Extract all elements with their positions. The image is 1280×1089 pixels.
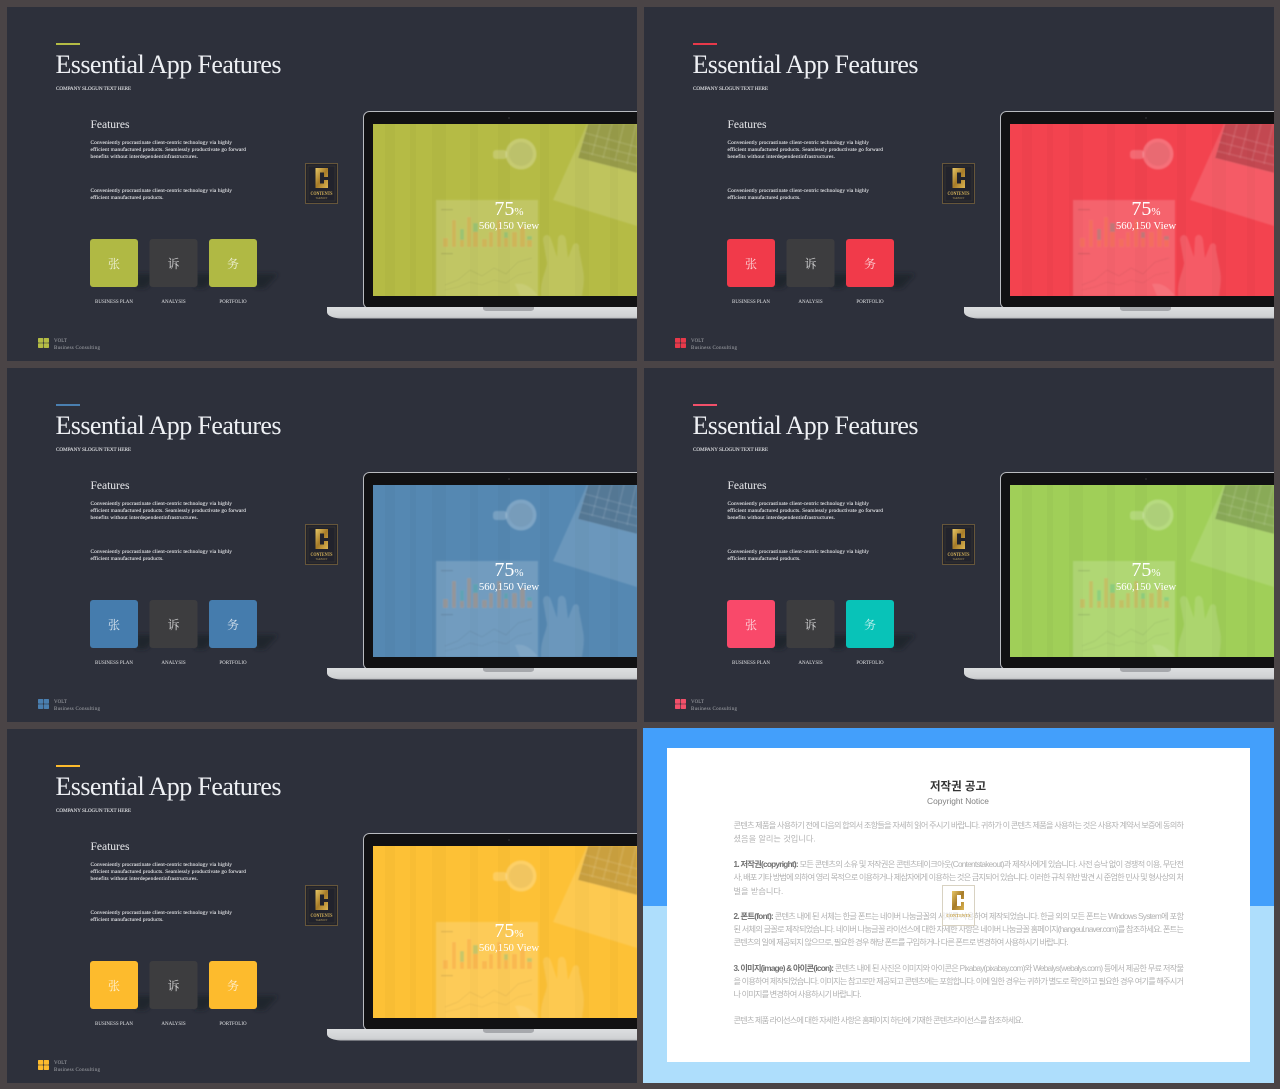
footer logo: Business Consulting [691, 707, 738, 712]
accent line [56, 404, 80, 406]
icon tiles: BUSINESS PLAN [95, 1022, 133, 1027]
icon tiles: PORTFOLIO [219, 300, 247, 305]
slogan: COMPANY SLOGUN TEXT HERE [693, 86, 768, 92]
text block: features [90, 118, 246, 201]
icon tiles: ANALYSIS [161, 300, 186, 305]
text block: features: Conveniently procrastinate client-centric technology via highly [728, 188, 869, 194]
gold badge [942, 164, 974, 204]
gold badge: CONTENTS [310, 192, 333, 197]
icon tiles: 务 [227, 979, 239, 993]
icon tiles: PORTFOLIO [219, 1022, 247, 1027]
slogan: COMPANY SLOGUN TEXT HERE [56, 86, 131, 92]
gold badge [942, 524, 974, 564]
gold badge [306, 524, 338, 564]
footer logo: VOLT [691, 700, 704, 705]
slogan: COMPANY SLOGUN TEXT HERE [56, 808, 131, 814]
text block: features: efficient manufactured products. Seamlessly productivate go forward [90, 868, 246, 875]
text block: features: efficient manufactured products. [90, 194, 164, 201]
icon tiles: 务 [227, 618, 239, 632]
text block: features: Conveniently procrastinate client-centric technology via highly [90, 188, 232, 194]
laptop mockup [327, 834, 654, 1040]
laptop mockup [327, 112, 654, 318]
text block: features: efficient manufactured products. Seamlessly productivate go forward [728, 146, 883, 153]
text block: features: benefits without interdependentinfrastructures. [90, 875, 198, 882]
copyright body text: 3. 이미지(image) & 아이콘(icon): 콘텐츠 내에 된 사진은 이미지와 아이콘은 Pixabay(pixabay.com)와 Webalys(webalys.com) 등에서 제공한 무료 저작물 [734, 963, 1184, 973]
panel: green slide [644, 368, 1280, 722]
copyright body text: 2. 폰트(font): 콘텐츠 내에 된 서체는 한글 폰트는 네이버 나눔글꼴의 서체를 사용하여 제작되었습니다. 한글 외의 모든 폰트는 Windows System에 포함 [734, 911, 1184, 921]
text block: features: efficient manufactured products. Seamlessly productivate go forward [90, 146, 246, 153]
footer logo [38, 699, 100, 712]
footer logo [38, 1060, 100, 1073]
icon tiles: 诉 [804, 257, 817, 271]
icon tiles: BUSINESS PLAN [95, 661, 133, 666]
text block: features: Conveniently procrastinate client-centric technology via highly [90, 910, 232, 916]
laptop mockup: 75% [494, 920, 524, 942]
icon tiles: 张 [108, 257, 120, 271]
text block: features: efficient manufactured products. [728, 555, 800, 562]
footer logo: VOLT [54, 339, 67, 344]
icon tiles: 务 [864, 257, 876, 271]
footer logo: Business Consulting [54, 707, 100, 712]
footer logo: Business Consulting [54, 1068, 100, 1073]
gold badge: CONTENTS [310, 914, 333, 919]
title: Essential App Features [56, 772, 282, 801]
text block: features: benefits without interdependentinfrastructures. [728, 153, 835, 160]
icon tiles [727, 600, 915, 666]
laptop mockup: 560,150 View [479, 581, 539, 593]
text block: features: efficient manufactured products. [728, 194, 800, 201]
text block: features: Conveniently procrastinate client-centric technology via highly [728, 549, 869, 555]
slogan: COMPANY SLOGUN TEXT HERE [693, 447, 768, 453]
icon tiles [90, 961, 278, 1027]
text block: features: Features [90, 479, 130, 492]
text block: features: Conveniently procrastinate client-centric technology via highly [728, 501, 869, 507]
text block: features: Features [90, 118, 130, 131]
gold badge: TAKEOUT [315, 197, 328, 200]
gold badge [306, 164, 338, 204]
copyright body text [734, 820, 1184, 1025]
copyright body text: 콘텐츠 제품을 사용하기 전에 다음의 합의서 조항들을 자세히 읽어 주시기 바랍니다. 귀하가 이 콘텐츠 제품을 사용하는 것은 사용자 계약서 보증에 동의하 [734, 820, 1184, 830]
text block: features: Conveniently procrastinate client-centric technology via highly [90, 501, 232, 507]
icon tiles: PORTFOLIO [219, 661, 247, 666]
text block: features: efficient manufactured products. Seamlessly productivate go forward [90, 507, 246, 514]
gold badge: CONTENTS [310, 553, 333, 558]
icon tiles: 张 [745, 257, 757, 271]
accent line [56, 43, 80, 45]
copyright body text: 1. 저작권(copyright): 모든 콘텐츠의 소유 및 저작권은 콘텐츠테이크아웃(Contentstakeout)과 제작사에게 있습니다. 사전 승낙 없이 경쟁적 이용, 무단전 [734, 859, 1184, 869]
copyright heading: Copyright Notice [927, 796, 989, 806]
text block: features: Conveniently procrastinate client-centric technology via highly [728, 140, 869, 146]
laptop mockup: 75% [1131, 198, 1161, 220]
text block: features: Features [90, 840, 130, 853]
icon tiles: PORTFOLIO [856, 300, 884, 305]
icon tiles: PORTFOLIO [856, 661, 884, 666]
gold badge: TAKEOUT [952, 197, 965, 200]
icon tiles: 张 [108, 618, 120, 632]
laptop mockup: 560,150 View [1116, 220, 1176, 232]
laptop mockup: 75% [1131, 559, 1161, 581]
text block: features: Conveniently procrastinate client-centric technology via highly [90, 549, 232, 555]
text block: features [90, 479, 246, 562]
laptop mockup [964, 472, 1280, 680]
copyright body text: 을 이용하여 제작되었습니다. 이미지는 참고로만 제공되고 콘텐츠에는 포함합니다. 이에 일한 경우는 귀하가 별도로 확인하고 필요한 경우 여기를 해주시거 [734, 976, 1184, 986]
title: Essential App Features [692, 411, 918, 440]
accent line [693, 404, 717, 406]
copyright body text: 나 이미지를 변경하여 사용하시기 바랍니다. [734, 989, 862, 999]
icon tiles: 诉 [167, 979, 180, 993]
accent line [693, 43, 717, 45]
icon tiles: BUSINESS PLAN [95, 300, 133, 305]
text block: features: efficient manufactured products. [90, 916, 164, 923]
laptop mockup [964, 112, 1280, 318]
icon tiles: 务 [227, 257, 239, 271]
footer logo: Business Consulting [54, 346, 100, 351]
slogan: COMPANY SLOGUN TEXT HERE [56, 447, 131, 453]
title: Essential App Features [692, 50, 918, 79]
footer logo [675, 338, 738, 351]
icon tiles: BUSINESS PLAN [732, 300, 770, 305]
text block: features: Conveniently procrastinate client-centric technology via highly [90, 862, 232, 868]
watermark badge [942, 886, 974, 926]
icon tiles [90, 600, 278, 666]
text block: features [728, 479, 883, 562]
copyright heading [927, 779, 989, 806]
laptop mockup: 560,150 View [479, 942, 539, 954]
text block: features [728, 118, 883, 201]
watermark badge: CONTENTS [946, 913, 971, 918]
footer logo: VOLT [691, 339, 704, 344]
laptop mockup: 75% [494, 559, 524, 581]
footer logo: VOLT [54, 700, 67, 705]
laptop mockup [327, 472, 654, 680]
text block: features: benefits without interdependentinfrastructures. [90, 514, 198, 521]
icon tiles: ANALYSIS [161, 661, 186, 666]
copyright body text: 사, 배포 기타 방법에 의하여 영리 목적으로 이용하거나 제삼자에게 이용하는 것은 금지되어 있습니다. 이러한 규칙 위반 발견 시 준엄한 민사 및 형사상의 처 [734, 872, 1184, 882]
laptop mockup: 75% [494, 198, 524, 220]
laptop mockup: 560,150 View [479, 220, 539, 232]
panel: red slide [644, 7, 1280, 361]
icon tiles: 张 [745, 618, 757, 632]
copyright body text: 콘텐츠의 일에 제공되지 않으므로, 필요한 경우 해당 폰트를 구입하거나 다른 폰트로 변경하여 사용하시기 바랍니다. [734, 937, 1068, 947]
panel: yellow slide [7, 729, 654, 1083]
text block: features [90, 840, 246, 923]
icon tiles: 诉 [167, 618, 180, 632]
icon tiles [90, 239, 278, 305]
text block: features: Features [728, 118, 767, 131]
gold badge: CONTENTS [948, 553, 970, 558]
icon tiles: 诉 [804, 618, 817, 632]
footer logo [38, 338, 100, 351]
title: Essential App Features [56, 411, 282, 440]
copyright body text: 콘텐츠 제품 라이선스에 대한 자세한 사항은 홈페이지 하단에 기재한 콘텐츠라이선스를 참조하세요. [734, 1015, 1024, 1025]
title: Essential App Features [56, 50, 282, 79]
footer logo [675, 699, 738, 712]
accent line [56, 765, 80, 767]
gold badge [306, 886, 338, 926]
text block: features: efficient manufactured products. Seamlessly productivate go forward [728, 507, 883, 514]
gold badge: CONTENTS [948, 192, 970, 197]
copyright body text: 된 서체의 글꼴로 제작되었습니다. 네이버 나눔글꼴 라이선스에 대한 자세한 사항은 네이버 나눔글꼴 홈페이지(hangeul.naver.com)를 참조하세요. 폰트는 [734, 924, 1184, 934]
panel: copyright notice [643, 728, 1274, 1083]
copyright body text: 셨음을 알리는 것입니다. [734, 834, 816, 844]
text block: features: benefits without interdependentinfrastructures. [728, 514, 835, 521]
gold badge: TAKEOUT [315, 558, 328, 561]
icon tiles: 诉 [167, 257, 180, 271]
text block: features: Conveniently procrastinate client-centric technology via highly [90, 140, 232, 146]
icon tiles: 务 [864, 618, 876, 632]
gold badge: TAKEOUT [315, 919, 328, 922]
gold badge: TAKEOUT [952, 558, 965, 561]
icon tiles: ANALYSIS [161, 1022, 186, 1027]
footer logo: Business Consulting [691, 346, 738, 351]
icon tiles [727, 239, 915, 305]
copyright body text: 벌을 받습니다. [734, 886, 783, 896]
icon tiles: ANALYSIS [798, 300, 823, 305]
text block: features: efficient manufactured products. [90, 555, 164, 562]
laptop mockup: 560,150 View [1116, 581, 1176, 593]
footer logo: VOLT [54, 1061, 67, 1066]
icon tiles: ANALYSIS [798, 661, 823, 666]
icon tiles: 张 [108, 979, 120, 993]
icon tiles: BUSINESS PLAN [732, 661, 770, 666]
panel: blue slide [7, 368, 654, 722]
text block: features: Features [728, 479, 767, 492]
text block: features: benefits without interdependentinfrastructures. [90, 153, 198, 160]
copyright heading: 저작권 공고 [930, 779, 986, 793]
panel: olive slide [7, 7, 654, 361]
